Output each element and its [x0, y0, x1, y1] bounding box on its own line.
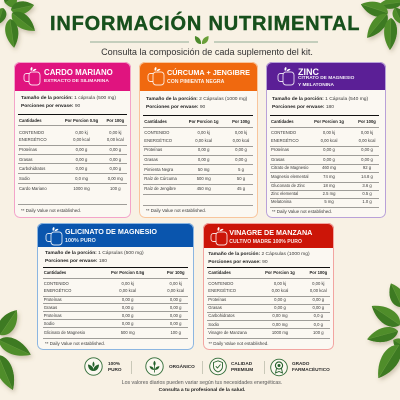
nutrition table: 1000 mg	[73, 186, 90, 191]
product subtitle: Y MELATONINA	[298, 83, 334, 88]
nutrition table: 500 mg	[197, 176, 211, 181]
card border	[14, 62, 131, 218]
label: PREMIUM	[231, 367, 253, 372]
nutrition table: 0,0 g	[314, 313, 323, 318]
nutrition table: ENERGÉTICO	[19, 136, 47, 142]
nutrition table: 0,00 kcal	[195, 138, 212, 143]
header: curcuma + jengibre	[139, 62, 258, 91]
nutrition table: Por 100g	[232, 119, 250, 124]
nutrition table: Por Porcion 0.5g	[65, 118, 98, 122]
nutrition table: 0,00 kcal	[119, 288, 136, 293]
nutrition table: 0,00 kcal	[359, 138, 375, 143]
nutrition table: Magnesio elemental	[271, 174, 308, 179]
nutrition table: Cantidades	[271, 119, 294, 124]
nutrition table: 0,00 kcal	[73, 136, 90, 142]
subtitle: Consulta la composición de cada suplemento del kit.	[101, 47, 313, 57]
panel: zinc	[266, 62, 386, 218]
nutrition table: 0,00 g	[312, 305, 324, 310]
serving info	[208, 252, 310, 265]
icon: capsule	[278, 67, 294, 86]
header: zinc	[266, 62, 386, 90]
nutrition table: 0,00 g	[170, 305, 182, 310]
serving info: Tamaño de la porción: 2 Cápsulas (1000 mg)	[208, 252, 310, 257]
nutrition table: Grasas	[44, 305, 57, 310]
footnote: ** Daily Value not established.	[146, 208, 206, 213]
serving info: Porciones por envase: 180	[272, 105, 334, 110]
nutrition table: Gluconato de Zinc	[271, 183, 305, 188]
nutrition table: 0,00 g	[274, 305, 286, 310]
nutrition table	[18, 114, 127, 205]
label	[108, 361, 122, 372]
serving info	[45, 250, 144, 264]
serving info: Porciones por envase: 90	[146, 105, 205, 110]
nutrition table: 0,00 g	[361, 157, 373, 162]
nutrition table: 0,00 g	[109, 146, 121, 152]
nutrition table: 0,00 g	[235, 147, 247, 152]
nutrition table: 100 g	[170, 330, 181, 335]
nutrition table: Sodio	[44, 321, 54, 326]
nutrition table: 0,00 kcal	[321, 138, 337, 143]
nutrition table: 0,00 g	[122, 313, 134, 318]
divider	[264, 361, 265, 374]
nutrition table: Por 100g	[358, 119, 376, 124]
nutrition table	[270, 115, 379, 208]
nutrition table: Carbohidratos	[19, 166, 45, 171]
nutrition table: 0,00 g	[170, 313, 182, 318]
badge: grado farmaceutico	[270, 358, 330, 376]
product name: CARDO MARIANO	[44, 68, 113, 77]
label: CALIDAD	[231, 361, 252, 366]
nutrition table: 0,00 g	[198, 147, 210, 152]
nutrition table: 0,00 mg	[272, 322, 288, 327]
nutrition table: 0,00 kj	[198, 130, 210, 135]
product name: CÚRCUMA + JENGIBRE	[167, 68, 250, 77]
nutrition table	[143, 115, 253, 206]
nutrition table: 0,00 kj	[312, 281, 324, 286]
nutrition table: Grasas	[271, 157, 284, 162]
serving info	[21, 96, 116, 109]
nutrition table: 0,00 g	[312, 297, 324, 302]
nutrition table: 0,00 g	[122, 321, 134, 326]
nutrition table: 0,00 g	[235, 157, 247, 162]
nutrition table: 14.8 g	[361, 174, 373, 179]
nutrition table: Proteínas	[208, 297, 226, 302]
product subtitle	[298, 76, 354, 88]
footnote: ** Daily Value not established.	[208, 341, 268, 346]
nutrition table: 0.5 g	[362, 191, 372, 196]
nutrition table: 0,00 kj	[170, 281, 182, 286]
nutrition table: 100 g	[313, 330, 324, 335]
nutrition table: Sodio	[19, 176, 30, 180]
nutrition table: Proteínas	[271, 147, 289, 152]
icon: shield	[209, 358, 227, 376]
footer note: Los valores diarios pueden variar según tus necesidades energéticas.	[122, 380, 282, 386]
nutrition table: Proteínas	[44, 313, 62, 318]
nutrition table: 0,00 g	[361, 147, 373, 152]
nutrition table: 0,00 g	[109, 156, 121, 162]
nutrition table: 0,00 kcal	[107, 136, 124, 142]
nutrition table: Grasas	[208, 305, 222, 310]
nutrition table: Cantidades	[208, 270, 231, 275]
nutrition table: 1.0 g	[362, 199, 372, 204]
nutrition table: Por 100g	[309, 270, 327, 275]
nutrition table: Por Porcion 0.5g	[111, 270, 144, 275]
label	[292, 361, 330, 372]
nutrition table: Proteínas	[144, 147, 162, 152]
nutrition table: 92 g	[363, 165, 371, 170]
nutrition table: Raíz de Cúrcuma	[144, 176, 177, 181]
nutrition table: 0,00 kj	[361, 130, 373, 135]
nutrition table: 50 mg	[198, 167, 210, 172]
nutrition table: 0,00 kcal	[167, 288, 184, 293]
nutrition table: 0,00 g	[323, 157, 335, 162]
nutrition table: 0,00 g	[76, 146, 87, 152]
nutrition table: 0,00 g	[122, 305, 134, 310]
nutrition table: 3.6 g	[362, 183, 372, 188]
divider	[202, 361, 203, 374]
nutrition table: Melatonina	[271, 199, 292, 204]
footer note: Consulta a tu profesional de la salud.	[159, 388, 245, 393]
serving info	[272, 96, 368, 110]
nutrition table: CONTENIDO	[44, 281, 69, 286]
nutrition table: CONTENIDO	[19, 130, 44, 134]
product subtitle: 100% PURO	[65, 238, 96, 244]
label: GRADO	[292, 361, 309, 366]
nutrition table: CONTENIDO	[271, 130, 296, 135]
nutrition table: 0,00 g	[274, 297, 286, 302]
label: 100%	[108, 361, 120, 366]
divider	[131, 361, 132, 374]
footnote: ** Daily Value not established.	[21, 208, 81, 213]
product subtitle: CON PIMIENTA NEGRA	[167, 79, 224, 85]
nutrition table: ENERGÉTICO	[208, 288, 236, 293]
label: FARMACÉUTICO	[292, 367, 330, 372]
nutrition table: Pimienta Negra	[144, 167, 173, 172]
nutrition table: 0,00 g	[122, 297, 134, 302]
nutrition table: 0,00 kj	[75, 130, 88, 134]
nutrition table: 50 g	[237, 176, 245, 181]
nutrition table: Cantidades	[144, 119, 167, 124]
nutrition table: 450 mg	[197, 186, 211, 191]
serving info: Tamaño de la porción: 1 Cápsula (540 mg)	[272, 97, 368, 102]
serving info: Tamaño de la porción: 1 Cápsulas (500 mg)	[45, 251, 144, 256]
icon: leaves	[84, 357, 103, 376]
title divider with leaf icon	[90, 36, 318, 44]
footnote: ** Daily Value not established.	[272, 209, 332, 214]
icon: capsule	[24, 67, 40, 86]
nutrition table: 0,0 g	[314, 322, 323, 327]
nutrition table: CONTENIDO	[144, 130, 169, 135]
nutrition table: Proteínas	[44, 297, 62, 302]
badge: 100% puro	[84, 357, 122, 376]
serving info: Tamaño de la porción: 2 Cápsulas (1000 mg)	[146, 97, 247, 102]
panel: curcuma + jengibre	[139, 62, 258, 218]
nutrition table: 0,00 kj	[323, 130, 335, 135]
footer note	[122, 380, 282, 393]
nutrition table: 0,00 g	[109, 166, 121, 171]
product subtitle: CULTIVO MADRE 100% PURO	[229, 239, 302, 245]
nutrition table: 1000 mg	[272, 330, 288, 335]
nutrition table: 0,00 g	[76, 156, 87, 162]
nutrition table	[207, 267, 330, 339]
product name: ZINC	[298, 67, 319, 77]
serving info: Porciones por envase: 90	[21, 104, 80, 109]
icon: capsule	[210, 227, 228, 246]
label: ORGÁNICO	[169, 364, 195, 369]
nutrition table: 0,00 g	[323, 147, 335, 152]
nutrition table: Por 100g	[167, 270, 185, 275]
nutrition table: Cantidades	[19, 118, 42, 122]
nutrition table: CONTENIDO	[208, 281, 233, 286]
header: vinagre de manzana	[202, 223, 334, 248]
nutrition table: Por Porcion 1g	[265, 270, 295, 275]
nutrition table: 0,00 mg	[272, 313, 288, 318]
nutrition table: 45 g	[237, 186, 245, 191]
footnote: ** Daily Value not established.	[45, 341, 105, 346]
nutrition table: Carbohidratos	[208, 313, 235, 318]
nutrition table: Grasas	[144, 157, 158, 162]
nutrition table: 5 g	[238, 167, 244, 172]
nutrition table: 0,00 g	[170, 321, 182, 326]
icon: medal	[270, 358, 288, 376]
serving info: Porciones por envase: 90	[208, 260, 268, 265]
nutrition table: 0,00 g	[198, 157, 210, 162]
serving info	[146, 96, 247, 110]
nutrition table: Por 100g	[106, 118, 124, 122]
nutrition table: 500 mg	[121, 330, 135, 335]
serving info: Tamaño de la porción: 1 cápsula (500 mg)	[21, 96, 116, 101]
card border	[139, 62, 258, 218]
nutrition table: 100 g	[110, 186, 121, 191]
panel: glicinato de magnesio	[37, 223, 194, 350]
nutrition table: 460 mg	[322, 165, 336, 170]
icon: plant	[145, 357, 164, 376]
nutrition table: 0,00 kj	[274, 281, 286, 286]
nutrition table: Glicinato de Magnesio	[44, 330, 85, 335]
card border	[202, 223, 334, 350]
nutrition table: Raíz de Jengibre	[144, 186, 176, 191]
nutrition table: 0,00 kcal	[310, 288, 327, 293]
badge: organico	[145, 357, 195, 376]
serving info: Porciones por envase: 180	[45, 259, 107, 264]
icon: capsule	[148, 67, 164, 86]
card border	[37, 223, 194, 350]
nutrition table: Cantidades	[44, 270, 66, 275]
card border	[266, 62, 386, 218]
nutrition table: 74 mg	[323, 174, 335, 179]
nutrition table: Grasas	[19, 156, 32, 162]
header: cardo mariano	[14, 62, 131, 91]
nutrition table: 0,00 g	[76, 166, 87, 171]
nutrition table: Vinagre de Manzana	[208, 330, 247, 335]
nutrition table	[43, 267, 188, 339]
nutrition table: ENERGÉTICO	[44, 288, 71, 293]
nutrition table: Cardo Mariano	[19, 186, 47, 191]
nutrition table: 0,00 kj	[235, 130, 247, 135]
nutrition table: 0,00 kj	[109, 130, 121, 134]
nutrition table: 2.5 mg	[323, 191, 335, 196]
nutrition table: 0,00 kcal	[233, 138, 249, 143]
nutrition table: Por Porcion 1g	[189, 119, 219, 124]
product subtitle: EXTRACTO DE SILIMARINA	[44, 79, 109, 84]
nutrition table: Por Porcion 1g	[314, 119, 344, 124]
panel: cardo mariano	[14, 62, 131, 218]
nutrition table: 0,00 g	[170, 297, 182, 302]
panel: vinagre de manzana	[202, 223, 334, 350]
nutrition table: Citrato de Magnesio	[271, 165, 308, 170]
nutrition table: 0,00 mg	[108, 176, 123, 180]
header: glicinato de magnesio	[37, 223, 194, 247]
badge: calidad premium	[209, 358, 253, 376]
product subtitle: CITRATO DE MAGNESIO	[298, 76, 354, 81]
nutrition table: 5 mg	[324, 199, 334, 204]
product name: VINAGRE DE MANZANA	[229, 228, 312, 237]
nutrition table: 0,00 kcal	[272, 288, 288, 293]
nutrition table: Sodio	[208, 322, 219, 327]
nutrition table: Proteínas	[19, 146, 37, 152]
nutrition table: ENERGÉTICO	[271, 138, 299, 143]
nutrition table: 0,0 mg	[75, 176, 88, 180]
product name: GLICINATO DE MAGNESIO	[65, 227, 157, 236]
nutrition table: Zinc elemental	[271, 191, 298, 196]
title: INFORMACIÓN NUTRIMENTAL	[50, 13, 360, 35]
nutrition table: 0,00 kj	[122, 281, 134, 286]
icon: capsule	[46, 227, 62, 246]
label	[231, 361, 253, 372]
nutrition table: 18 mg	[323, 183, 335, 188]
label: PURO	[108, 367, 122, 372]
nutrition table: ENERGÉTICO	[144, 138, 172, 143]
